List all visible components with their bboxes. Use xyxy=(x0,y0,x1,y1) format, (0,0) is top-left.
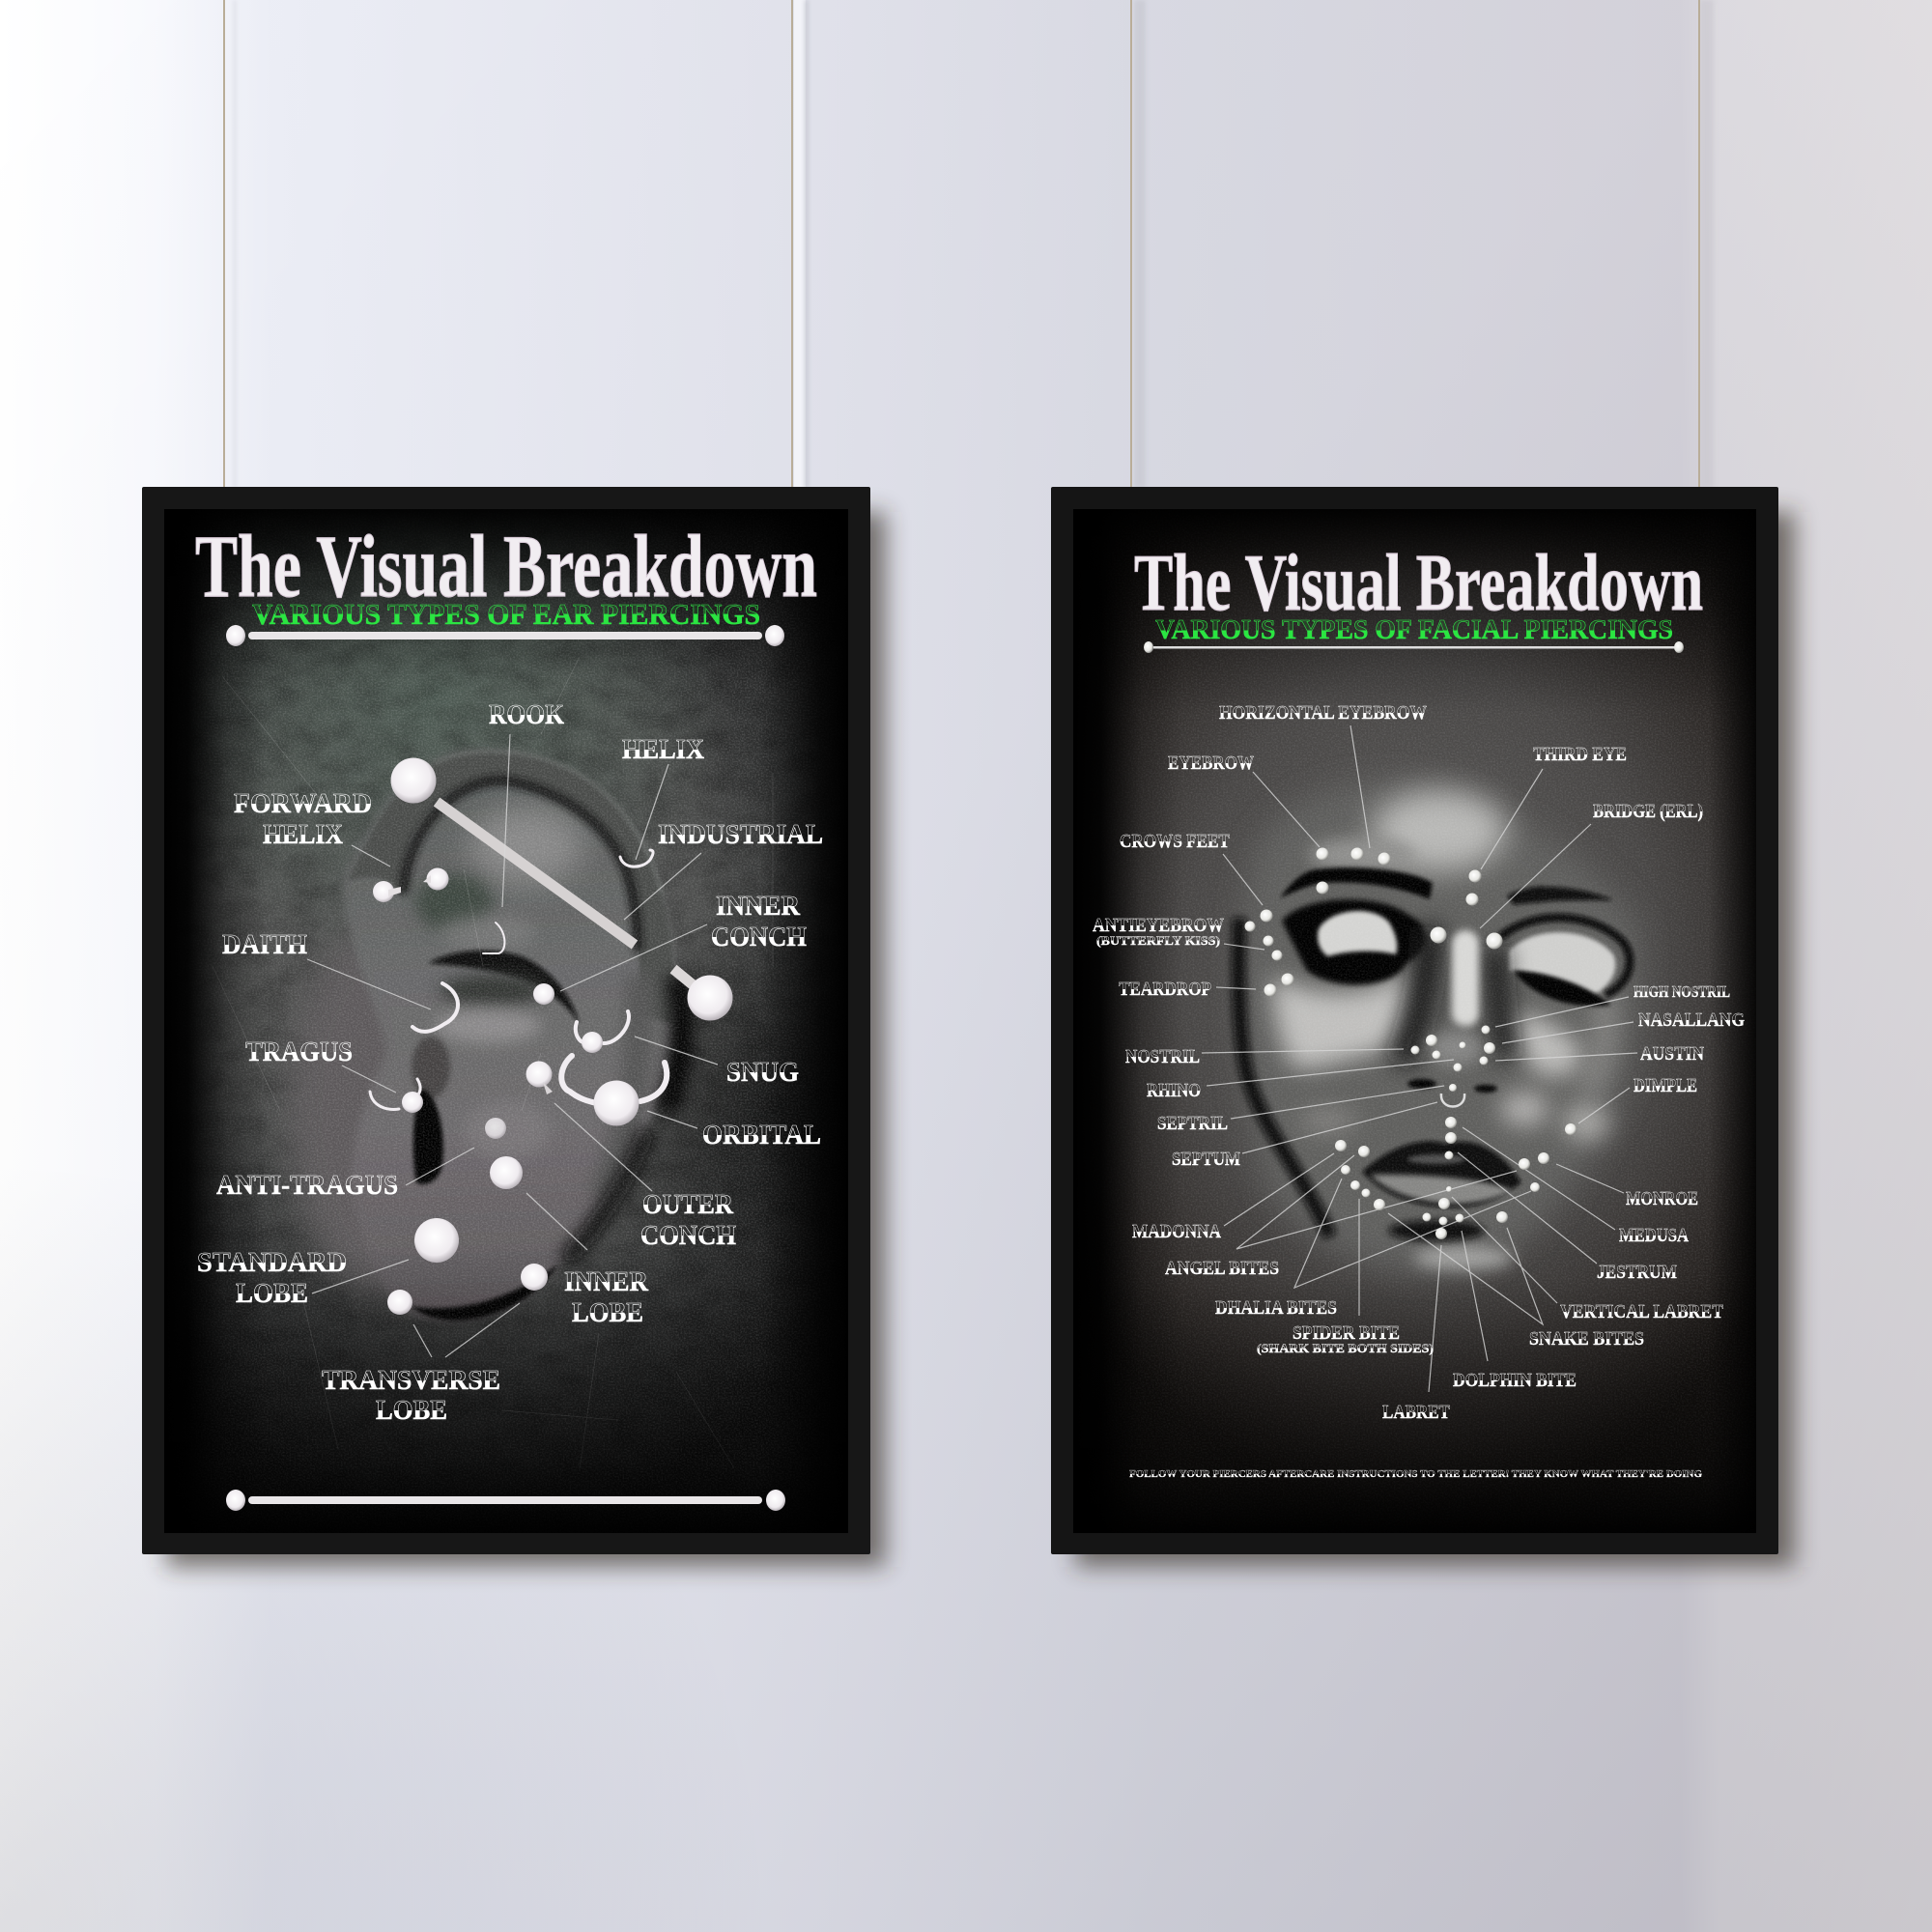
poster art xyxy=(1073,509,1756,1533)
label: industrial: INDUSTRIAL xyxy=(658,819,823,850)
label: standard lobe xyxy=(197,1247,347,1309)
septum ring xyxy=(1441,1094,1464,1107)
right eye socket xyxy=(1500,918,1630,995)
label: transverse lobe: LOBE xyxy=(376,1395,447,1426)
outer ear shadow xyxy=(667,976,682,1111)
label: anti-eyebrow: (BUTTERFLY KISS) xyxy=(1096,933,1220,948)
label: inner conch: INNER xyxy=(716,891,801,922)
rings xyxy=(370,850,667,1109)
label: standard lobe: LOBE xyxy=(236,1278,308,1309)
label: madonna: MADONNA xyxy=(1132,1221,1221,1242)
label: dolphin bite: DOLPHIN BITE xyxy=(1453,1370,1577,1391)
label: inner lobe: LOBE xyxy=(572,1297,643,1328)
label: teardrop: TEARDROP xyxy=(1119,979,1211,1000)
label: anti-tragus: ANTI-TRAGUS xyxy=(216,1170,398,1201)
right lash xyxy=(1514,971,1611,1006)
label: tragus: TRAGUS xyxy=(245,1037,353,1067)
label: standard lobe: STANDARD xyxy=(197,1247,347,1278)
hanging wires xyxy=(224,0,1699,488)
left brow xyxy=(1280,867,1433,899)
label: transverse lobe xyxy=(322,1365,500,1426)
label: inner lobe: INNER xyxy=(564,1266,649,1297)
poster frame xyxy=(142,487,870,1554)
label: eyebrow: EYEBROW xyxy=(1168,753,1254,774)
label: anti-eyebrow xyxy=(1093,915,1224,948)
ear canal xyxy=(413,1089,443,1184)
nose xyxy=(1401,927,1430,1063)
right brow xyxy=(1507,887,1613,905)
label: jestrum: JESTRUM xyxy=(1597,1262,1677,1283)
lips xyxy=(1362,1141,1521,1208)
label: high nostril: HIGH NOSTRIL xyxy=(1634,982,1730,1001)
title: The Visual Breakdown xyxy=(195,517,817,615)
label: austin: AUSTIN xyxy=(1640,1043,1704,1065)
tragus xyxy=(412,1037,450,1098)
barbell: industrial xyxy=(390,757,732,1020)
label: outer conch: OUTER xyxy=(642,1189,734,1220)
leader lines xyxy=(1202,725,1637,1392)
label: vertical labret: VERTICAL LABRET xyxy=(1560,1301,1724,1322)
piercing dots xyxy=(1244,848,1577,1239)
subtitle: VARIOUS TYPES OF FACIAL PIERCINGS xyxy=(1155,615,1673,645)
right cheek xyxy=(1512,1013,1584,1077)
label: forward helix xyxy=(234,788,372,850)
left eyelid xyxy=(1318,911,1397,956)
subtitle: VARIOUS TYPES OF EAR PIERCINGS xyxy=(252,597,760,631)
label: inner lobe xyxy=(564,1266,649,1328)
piercing balls xyxy=(373,867,639,1315)
face illustration xyxy=(1238,783,1638,1271)
label: dimple: DIMPLE xyxy=(1634,1075,1697,1096)
forehead glow xyxy=(1372,790,1507,871)
label: rhino: RHINO xyxy=(1147,1080,1201,1101)
top barbell divider xyxy=(226,625,784,646)
label: bridge (erl): BRIDGE (ERL) xyxy=(1593,801,1703,822)
right eyelid xyxy=(1509,932,1615,995)
left eye socket xyxy=(1282,899,1426,984)
label: rook: ROOK xyxy=(489,699,564,730)
label: anti-eyebrow: ANTIEYEBROW xyxy=(1093,915,1224,936)
footer note: FOLLOW YOUR PIERCERS AFTERCARE INSTRUCTIONS TO THE LETTER! THEY KNOW WHAT THEY'RE DOING xyxy=(1129,1468,1702,1480)
hair streak xyxy=(1238,918,1330,1236)
label: crows feet: CROWS FEET xyxy=(1120,831,1231,852)
label: daith: DAITH xyxy=(222,929,307,960)
ear illustration xyxy=(290,749,682,1321)
panel: facial piercings poster xyxy=(1051,487,1795,1567)
label: labret: LABRET xyxy=(1382,1402,1451,1423)
label: monroe: MONROE xyxy=(1626,1188,1698,1209)
label: horizontal eyebrow: HORIZONTAL EYEBROW xyxy=(1219,702,1427,724)
frame shadow xyxy=(1075,512,1795,1567)
antitragus highlight xyxy=(468,1105,547,1157)
label: forward helix: HELIX xyxy=(263,819,343,850)
label: helix: HELIX xyxy=(622,734,704,765)
left cheek xyxy=(1272,966,1409,1068)
label: third eye: THIRD EYE xyxy=(1533,744,1627,765)
label: septum: SEPTUM xyxy=(1172,1149,1240,1170)
frame shadow xyxy=(166,512,886,1567)
label: spider bite: (SHARK BITE BOTH SIDES) xyxy=(1257,1341,1434,1355)
label: septril: SEPTRIL xyxy=(1157,1113,1228,1134)
leader lines xyxy=(307,734,718,1357)
lobe shadow xyxy=(410,1264,558,1321)
label: orbital: ORBITAL xyxy=(702,1120,821,1151)
title: The Visual Breakdown xyxy=(1134,538,1703,628)
label: spider bite xyxy=(1257,1322,1434,1355)
label: angel bites: ANGEL BITES xyxy=(1165,1258,1279,1279)
label: inner conch xyxy=(711,891,807,952)
label: medusa: MEDUSA xyxy=(1619,1225,1689,1246)
label: spider bite: SPIDER BITE xyxy=(1293,1322,1400,1344)
label: dhalia bites: DHALIA BITES xyxy=(1215,1297,1337,1319)
label: outer conch xyxy=(640,1189,736,1251)
label: inner conch: CONCH xyxy=(711,922,807,952)
poster frame xyxy=(1051,487,1778,1554)
label: nasallang: NASALLANG xyxy=(1638,1009,1745,1031)
label: outer conch: CONCH xyxy=(640,1220,736,1251)
bottom barbell divider xyxy=(226,1490,785,1511)
label: snake bites: SNAKE BITES xyxy=(1529,1328,1644,1350)
panel: ear piercings poster xyxy=(142,487,886,1567)
barbell divider xyxy=(1144,641,1684,653)
poster art xyxy=(164,509,848,1533)
label: nostril: NOSTRIL xyxy=(1125,1046,1200,1067)
label: snug: SNUG xyxy=(726,1057,799,1088)
label: forward helix: FORWARD xyxy=(234,788,372,819)
label: transverse lobe: TRANSVERSE xyxy=(322,1365,500,1396)
